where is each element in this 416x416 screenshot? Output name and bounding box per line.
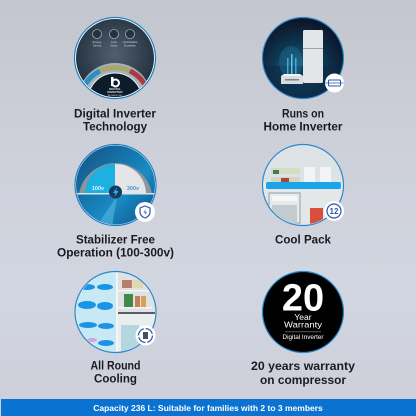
heading: cool pack: Cool Pack [275,232,331,246]
icon: voltage dial circle: 300v [127,186,140,192]
icon: inverter gauge circle: INVERTER [107,90,123,94]
heading: stabilizer free operation [57,232,174,260]
icon: freezer shelf circle [262,144,344,227]
heading: stabilizer free operation: Stabilizer Free [76,232,155,246]
heading: runs on home inverter [264,106,343,134]
icon: cooling badge [136,326,156,346]
panel: 20 year warranty [251,272,355,387]
heading: all round cooling: All Round [90,358,140,372]
heading: 20 years warranty on compressor: on compressor [260,373,346,387]
heading: digital inverter technology [74,106,156,134]
icon: inverter gauge circle: Saving [93,44,102,48]
icon: airflow fridge circle [74,271,158,354]
icon: warranty badge: Digital Inverter [282,335,324,341]
icon: inverter gauge circle: Durability [124,44,136,48]
icon: shield badge [135,202,155,222]
heading: digital inverter technology: Technology [83,120,147,134]
heading: stabilizer free operation: Operation (100-300v) [57,246,174,260]
icon: inverter gauge circle: Energy [93,40,102,44]
icon: voltage dial circle [74,144,157,228]
icon: home inverter badge [325,74,344,92]
icon: inverter gauge circle: TECHNOLOGY [107,95,123,97]
icon: warranty badge: Warranty [284,320,323,330]
panel: cool pack [262,144,344,246]
heading: digital inverter technology: Digital Inverter [74,106,156,120]
heading: runs on home inverter: Runs on [282,106,324,120]
heading: 20 years warranty on compressor [251,359,355,387]
panel: stabilizer free operation [57,144,174,260]
panel: runs on home inverter [262,18,344,134]
heading: 20 years warranty on compressor: 20 years warranty [251,359,355,373]
icon: refrigerator on inverter circle [262,18,344,100]
icon: inverter gauge circle: Less [111,40,118,44]
footer bar: capacity [1,399,416,416]
panel: all round cooling [74,271,158,386]
icon: voltage dial circle: 100v [92,186,105,192]
heading: all round cooling [90,358,140,386]
panel: digital inverter technology [74,17,156,137]
icon: warranty badge: 20 [282,278,324,320]
heading: all round cooling: Cooling [94,372,137,386]
icon: inverter gauge circle: Unshakable [123,40,138,44]
footer bar: capacity: Capacity 236 L: Suitable for families with 2 to 3 members [93,403,323,413]
icon: cool pack badge: 12 [330,207,339,216]
icon: inverter gauge circle [74,16,156,100]
icon: warranty badge [262,272,344,352]
icon: inverter gauge circle: DIGITAL [109,87,121,91]
icon: warranty badge: Year [294,312,312,322]
heading: runs on home inverter: Home Inverter [264,120,343,134]
icon: inverter gauge circle: Noise [110,44,118,48]
